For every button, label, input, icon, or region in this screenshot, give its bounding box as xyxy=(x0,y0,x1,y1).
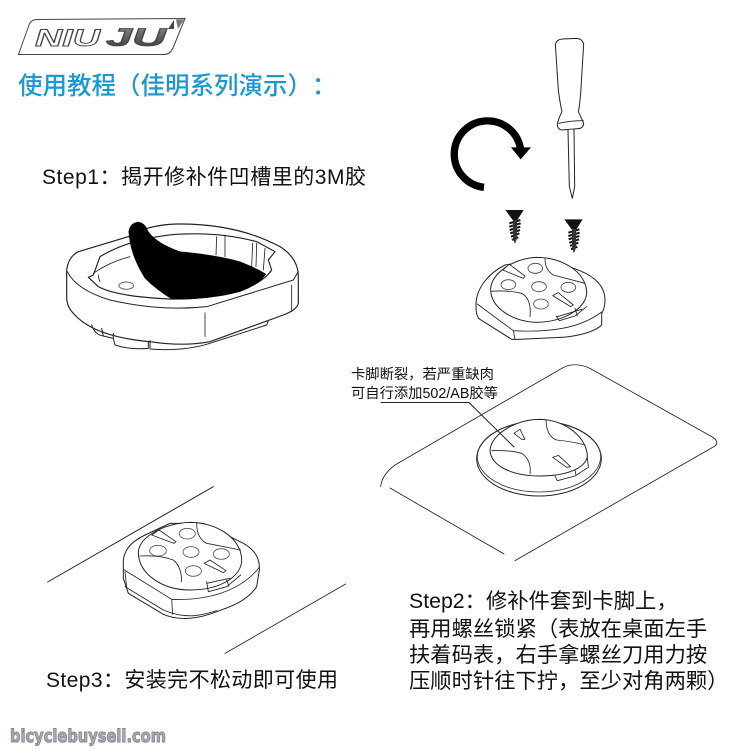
logo: NIU JU xyxy=(18,18,185,54)
title: 使用教程（佳明系列演示）： xyxy=(18,72,336,100)
icon: left screw xyxy=(505,210,524,244)
step 2 text xyxy=(409,589,728,693)
step 1 text: Step1：揭开修补件凹槽里的3M胶 xyxy=(42,166,366,189)
illustration: screwdriver xyxy=(555,38,584,198)
step 2 text: Step2：修补件套到卡脚上， xyxy=(409,589,678,613)
icon: right screw xyxy=(564,219,583,253)
callout text xyxy=(351,366,498,402)
illustration: step 1 mount with adhesive peeled back xyxy=(67,222,298,350)
logo: NIU JU: JU xyxy=(106,24,168,52)
illustration: installed mount, step 3 xyxy=(48,487,346,653)
logo: NIU JU: NIU xyxy=(35,25,101,52)
icon: clockwise rotation arrow xyxy=(454,121,531,187)
step 3 text: Step3：安装完不松动即可使用 xyxy=(46,669,338,692)
step 2 text: 扶着码表，右手拿螺丝刀用力按 xyxy=(409,642,707,667)
callout text: 可自行添加502/AB胶等 xyxy=(351,384,498,402)
step 2 text: 再用螺丝锁紧（表放在桌面左手 xyxy=(409,617,707,641)
callout text: 卡脚断裂，若严重缺肉 xyxy=(351,366,494,383)
illustration: mount with screw holes xyxy=(476,257,605,339)
illustration: mount on watch back xyxy=(381,365,717,561)
watermark: bicyclebuysell.com xyxy=(10,726,166,747)
step 2 text: 压顺时针往下拧，至少对角两颗） xyxy=(409,669,728,693)
callout: leader line xyxy=(381,402,514,447)
